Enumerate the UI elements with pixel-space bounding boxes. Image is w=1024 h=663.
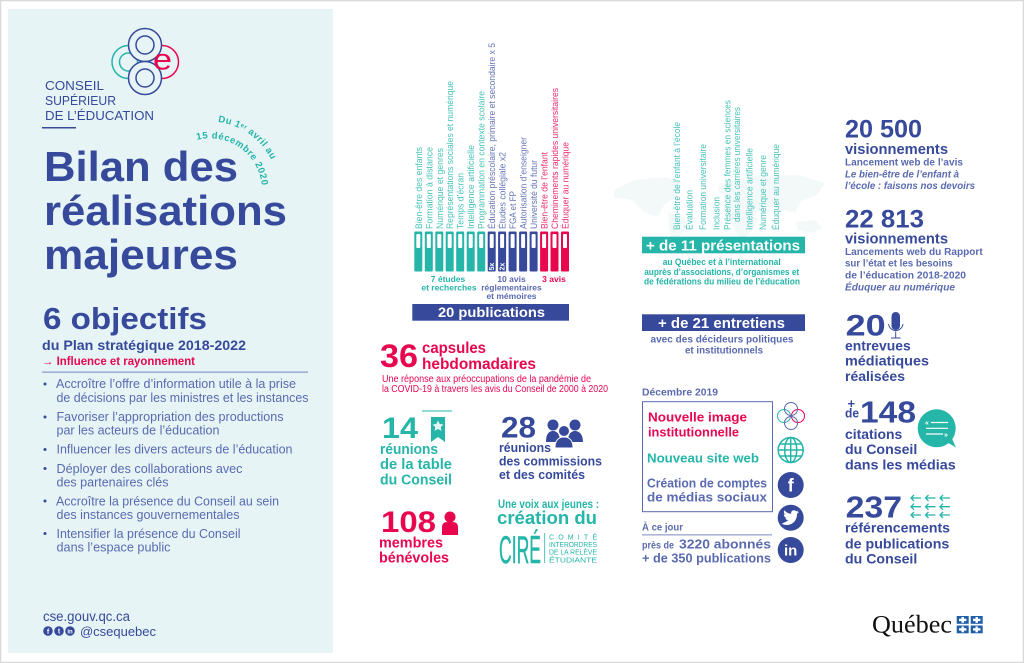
logo: Conseil supérieur de l'éducation: e bbox=[153, 44, 172, 76]
stat: 237 référencements: du Conseil bbox=[845, 550, 917, 566]
icon: linkedin bbox=[778, 537, 804, 563]
binder group captions: 3 avis bbox=[542, 274, 566, 284]
binder vertical labels: Représentations sociales et numérique bbox=[445, 81, 456, 229]
binder group captions: et mémoires bbox=[486, 291, 537, 301]
list of objectives: Intensifier la présence du Conseil bbox=[56, 527, 240, 541]
chart labels: presentation topics: Numérique et genre bbox=[758, 155, 769, 230]
title: majeures bbox=[44, 231, 238, 278]
stat: 14 réunions bbox=[380, 410, 452, 489]
stat: 28 réunions bbox=[499, 412, 602, 482]
binder group captions: 10 avis bbox=[497, 274, 526, 284]
icon: quote bubble bbox=[918, 409, 956, 448]
title bbox=[44, 143, 287, 278]
binder group captions: et recherches bbox=[421, 282, 477, 292]
stat: 20 500 visionnements bbox=[845, 116, 975, 192]
callout: création du CIRÉ: COMITÉ bbox=[549, 532, 597, 542]
icon: twitter bbox=[778, 505, 804, 531]
stat: 20 500 visionnements: Le bien-être de l’enfant à bbox=[845, 168, 959, 180]
stat: 28 réunions: et des comités bbox=[499, 467, 585, 482]
chart labels: presentation topics bbox=[672, 100, 782, 230]
list of objectives: dans l’espace public bbox=[56, 540, 170, 554]
list of objectives bbox=[44, 377, 308, 554]
icon: linkedin: in bbox=[784, 542, 797, 560]
logo: Conseil supérieur de l'éducation: DE L’ÉDUCATION bbox=[45, 108, 154, 123]
stat: + de 148 citations: de bbox=[845, 406, 859, 421]
icon: bookmark ribbon bbox=[422, 410, 452, 442]
chart: publications binders bbox=[412, 43, 572, 321]
title: réalisations bbox=[44, 187, 287, 234]
stat: 20 500 visionnements: 20 500 bbox=[845, 116, 922, 144]
stat: 108 membres bénévoles bbox=[379, 506, 458, 567]
binder vertical labels: Études collégiale x2 bbox=[498, 152, 509, 229]
stat: + de 148 citations: citations bbox=[845, 426, 903, 442]
list of objectives: Influencer les divers acteurs de l’éducation bbox=[56, 442, 293, 456]
logo: Conseil supérieur de l'éducation: CONSEIL bbox=[45, 78, 104, 93]
stat: 20 entrevues: réalisées bbox=[845, 368, 905, 384]
stat: 28 réunions: des commissions bbox=[499, 454, 602, 469]
icon: facebook: f bbox=[788, 476, 795, 496]
chart labels: presentation topics: dans les carrières universitaires bbox=[732, 107, 743, 222]
date arc text: avril au bbox=[248, 130, 276, 160]
stat: 20 entrevues: entrevues bbox=[845, 338, 911, 354]
binder vertical labels: Intelligence artificielle bbox=[466, 145, 477, 229]
chart labels: presentation topics: Évaluation bbox=[684, 190, 696, 230]
stat: 20 500 visionnements: l’école : faisons nos devoirs bbox=[845, 180, 975, 192]
heading: 6 objectifs: → Influence et rayonnement bbox=[42, 356, 195, 368]
stat: + de 148 citations: du Conseil bbox=[845, 441, 917, 457]
logo: Conseil supérieur de l'éducation: SUPÉRIEUR bbox=[45, 93, 116, 108]
contact and social handles: @csequebec bbox=[80, 624, 156, 639]
banner: + de 21 entretiens: + de 21 entretiens bbox=[658, 316, 785, 332]
stat: 108 membres bénévoles: membres bbox=[379, 536, 443, 552]
icon: group of people bbox=[546, 420, 583, 448]
logo: Québec bbox=[872, 612, 983, 638]
panel: décembre 2019: institutionnelle bbox=[648, 425, 739, 440]
date arc text: er bbox=[240, 124, 248, 129]
stat: 36 capsules: 36 bbox=[380, 338, 418, 374]
panel: décembre 2019: Nouvelle image bbox=[648, 410, 747, 425]
date arc text: 15 décembre 2020 bbox=[196, 132, 268, 185]
stat: 28 réunions: réunions bbox=[499, 440, 551, 455]
banner: 20 publications: 20 publications bbox=[438, 304, 545, 320]
binder group captions: réglementaires bbox=[481, 282, 542, 292]
stat: 237 référencements: 237 bbox=[846, 489, 902, 524]
stat: 108 membres bénévoles: bénévoles bbox=[379, 551, 449, 567]
stat: 22 813 visionnements: Lancements web du Rapport bbox=[845, 246, 983, 258]
binder vertical labels: Éduquer au numérique bbox=[560, 142, 572, 229]
heading: 6 objectifs: du Plan stratégique 2018-2022 bbox=[42, 337, 246, 353]
text: présentations details: auprès d’associations, d’organismes et bbox=[644, 267, 799, 277]
callout: création du CIRÉ: Une voix aux jeunes : bbox=[498, 499, 599, 511]
callout: création du CIRÉ: création du bbox=[497, 507, 597, 528]
binders bbox=[414, 232, 569, 272]
icon: arrows grid bbox=[911, 495, 950, 518]
title: Bilan des bbox=[44, 143, 238, 190]
panel: left sidebar bbox=[8, 9, 333, 653]
world map background bbox=[614, 175, 825, 242]
stat: 20 entrevues: 20 bbox=[846, 310, 886, 343]
binder group captions bbox=[421, 274, 566, 301]
stat: 14 réunions: de la table bbox=[380, 457, 452, 473]
text: présentations details: de fédérations du milieu de l’éducation bbox=[644, 276, 800, 286]
binder vertical labels: FGA et FP bbox=[508, 191, 519, 229]
binders: 2x bbox=[500, 263, 507, 270]
contact and social handles: in bbox=[67, 630, 73, 636]
icon: small logo bbox=[778, 402, 804, 430]
callout: création du CIRÉ: DE LA RELÈVE bbox=[549, 548, 597, 556]
stat: 36 capsules: la COVID-19 à travers les avis du Conseil de 2000 à 2020 bbox=[382, 384, 608, 395]
binder vertical labels: Bien-être de l’enfant bbox=[540, 152, 551, 229]
stat: 22 813 visionnements: de l’éducation 2018-2020 bbox=[845, 269, 966, 281]
stat: 237 référencements: de publications bbox=[845, 535, 950, 551]
stat: 22 813 visionnements: sur l’état et les besoins bbox=[845, 258, 953, 270]
stat: 36 capsules: capsules bbox=[422, 340, 486, 357]
banner: + de 11 présentations: + de 11 présentations bbox=[646, 238, 800, 254]
panel: décembre 2019: Décembre 2019 bbox=[642, 387, 718, 399]
binder vertical labels: Cheminements rapides universitaires bbox=[550, 88, 561, 229]
list of objectives: par les acteurs de l’éducation bbox=[56, 424, 220, 438]
stat: + de 148 citations: dans les médias bbox=[845, 456, 956, 472]
text: à ce jour bbox=[642, 521, 772, 566]
list of objectives: des partenaires clés bbox=[56, 476, 168, 490]
binder vertical labels: Numérique et genres bbox=[435, 148, 446, 229]
callout: création du CIRÉ: CIRÉ bbox=[499, 529, 541, 572]
text: présentations details: au Québec et à l’international bbox=[663, 257, 781, 267]
callout: création du CIRÉ bbox=[497, 499, 599, 572]
date arc text: Du 1 bbox=[218, 116, 240, 128]
list of objectives: Accroître l’offre d’information utile à la prise bbox=[56, 377, 296, 391]
stat: 22 813 visionnements: Éduquer au numérique bbox=[845, 281, 955, 294]
binder vertical labels: Programmation en contexte scolaire bbox=[477, 91, 488, 229]
icon: microphone bbox=[888, 312, 903, 338]
stat: 22 813 visionnements: visionnements bbox=[845, 230, 948, 247]
stat: 22 813 visionnements bbox=[845, 205, 983, 294]
binder vertical labels: Temps d’écran bbox=[456, 173, 467, 229]
binder vertical labels: Bien-être des enfants bbox=[414, 147, 425, 229]
contact and social handles: cse.gouv.qc.ca bbox=[43, 609, 130, 624]
stat: 20 500 visionnements: visionnements bbox=[845, 141, 948, 158]
stat: + de 148 citations: 148 bbox=[860, 395, 916, 430]
binder vertical labels bbox=[414, 43, 572, 229]
contact and social handles: t bbox=[58, 628, 61, 636]
icon: quote bubble: « bbox=[925, 420, 929, 427]
logo: Conseil supérieur de l'éducation bbox=[42, 28, 178, 128]
binder vertical labels: Éducation préscolaire, primaire et secondaire x 5 bbox=[487, 43, 498, 229]
heading: 6 objectifs bbox=[42, 301, 308, 372]
text: entretiens details: avec des décideurs politiques bbox=[650, 333, 794, 345]
stat: + de 148 citations: + bbox=[848, 396, 856, 411]
text: à ce jour: + de 350 publications bbox=[642, 551, 771, 566]
icon: facebook bbox=[778, 472, 804, 498]
panel: décembre 2019 bbox=[642, 387, 772, 512]
contact and social handles: f bbox=[47, 629, 50, 636]
stat: 36 capsules: Une réponse aux préoccupations de la pandémie de bbox=[382, 374, 591, 385]
text: à ce jour: près de bbox=[642, 539, 674, 551]
binder group captions: 7 études bbox=[431, 274, 466, 284]
stat: 20 entrevues: médiatiques bbox=[845, 353, 929, 369]
text: entretiens details bbox=[650, 333, 794, 356]
panel: décembre 2019: Création de comptes bbox=[647, 475, 767, 490]
stat: 20 500 visionnements: Lancement web de l’avis bbox=[845, 157, 963, 169]
stat: 22 813 visionnements: 22 813 bbox=[845, 205, 924, 233]
icon: quote bubble: » bbox=[944, 432, 948, 439]
stat: 14 réunions: du Conseil bbox=[380, 473, 452, 489]
binders: 5x bbox=[489, 263, 496, 270]
stat: 237 référencements: référencements bbox=[845, 520, 950, 536]
stat: + de 148 citations bbox=[845, 395, 956, 472]
stat: 20 entrevues bbox=[845, 310, 929, 384]
binder vertical labels: Autorisation d’enseigner bbox=[519, 137, 530, 229]
text: entretiens details: et institutionnels bbox=[685, 344, 763, 356]
callout: création du CIRÉ: INTERORDRES bbox=[549, 542, 597, 549]
chart labels: presentation topics: Inclusion bbox=[712, 197, 722, 230]
list of objectives: des instances gouvernementales bbox=[56, 508, 239, 522]
text: à ce jour: À ce jour bbox=[642, 521, 683, 534]
stat: 108 membres bénévoles: 108 bbox=[381, 506, 436, 539]
callout: création du CIRÉ: ÉTUDIANTE bbox=[549, 556, 597, 565]
stat: 36 capsules: hebdomadaires bbox=[422, 356, 536, 373]
chart labels: presentation topics: Formation universitaire bbox=[698, 144, 709, 230]
stat: 28 réunions: 28 bbox=[501, 412, 536, 445]
list of objectives: Favoriser l’appropriation des productions bbox=[56, 410, 284, 424]
panel: décembre 2019: de médias sociaux bbox=[647, 490, 768, 505]
stat: 14 réunions: 14 bbox=[382, 412, 418, 445]
banner: 20 publications bbox=[412, 304, 569, 321]
contact and social handles bbox=[43, 609, 156, 639]
list of objectives: de décisions par les ministres et les instances bbox=[56, 391, 308, 405]
chart labels: presentation topics: Éduquer au numérique bbox=[771, 144, 782, 230]
stat: 14 réunions: réunions bbox=[380, 442, 438, 458]
chart labels: presentation topics: Bien-être de l’enfant à l’école bbox=[672, 122, 683, 230]
icon: person bbox=[442, 512, 458, 535]
chart labels: presentation topics: Intelligence artificielle bbox=[744, 148, 756, 230]
text: présentations details bbox=[644, 257, 800, 286]
heading: 6 objectifs: 6 objectifs bbox=[43, 301, 207, 336]
stat: 237 référencements bbox=[845, 489, 950, 566]
panel: décembre 2019: Nouveau site web bbox=[647, 451, 759, 466]
list of objectives: Déployer des collaborations avec bbox=[56, 462, 242, 476]
chart labels: presentation topics: Présence des femmes en sciences bbox=[722, 100, 734, 230]
icon: globe bbox=[778, 438, 803, 462]
logo: Québec: Québec bbox=[872, 612, 952, 638]
text: à ce jour: 3220 abonnés bbox=[679, 536, 771, 551]
banner: + de 21 entretiens bbox=[642, 314, 805, 332]
binder vertical labels: Université du futur bbox=[529, 160, 540, 229]
stat: 36 capsules bbox=[380, 338, 608, 395]
list of objectives: Accroître la présence du Conseil au sein bbox=[56, 494, 279, 508]
binder vertical labels: Formation à distance bbox=[424, 147, 435, 229]
